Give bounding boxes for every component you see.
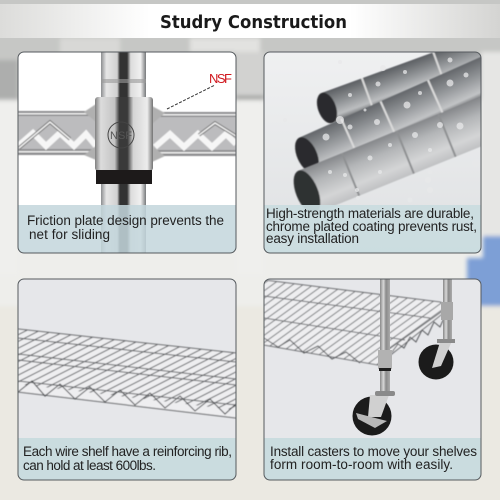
back caster xyxy=(418,279,455,380)
front post xyxy=(380,279,390,394)
title: Studry Construction xyxy=(160,12,347,33)
panel: chrome rods xyxy=(264,52,482,254)
wire shelf xyxy=(18,329,236,418)
caption strip xyxy=(18,205,236,253)
NSF callout xyxy=(167,71,232,109)
caption strip: Each wire shelf have a reinforcing rib, xyxy=(23,444,232,459)
caption strip: easy installation xyxy=(266,231,359,246)
wire shelf rails xyxy=(18,104,236,162)
rod top xyxy=(316,52,480,124)
NSF stamp xyxy=(108,122,134,148)
title band xyxy=(0,4,500,38)
panel: casters xyxy=(264,279,481,480)
caption strip: form room-to-room with easily. xyxy=(270,457,453,472)
collar xyxy=(95,97,153,171)
NSF callout: NSF xyxy=(209,71,232,86)
black friction ring xyxy=(96,170,152,184)
post collar xyxy=(378,350,392,371)
caption strip: High-strength materials are durable, xyxy=(266,206,474,221)
rod middle xyxy=(294,56,480,169)
caption strip xyxy=(264,205,481,253)
caption strip xyxy=(264,438,481,480)
caption strip: can hold at least 600lbs. xyxy=(23,458,156,473)
caption strip xyxy=(18,438,236,480)
caption strip: chrome plated coating prevents rust, xyxy=(266,219,477,234)
caption strip: net for sliding xyxy=(29,227,110,242)
caption strip: Install casters to move your shelves xyxy=(270,444,477,459)
rod bottom xyxy=(292,98,480,213)
panel: wire shelf xyxy=(18,279,236,480)
NSF stamp: NSF xyxy=(110,130,132,142)
wire shelf xyxy=(264,280,451,365)
caption strip: Friction plate design prevents the xyxy=(27,213,224,228)
front caster xyxy=(352,391,395,436)
water droplets xyxy=(322,58,468,198)
panel: friction plate xyxy=(18,52,236,253)
chrome post xyxy=(101,52,146,253)
